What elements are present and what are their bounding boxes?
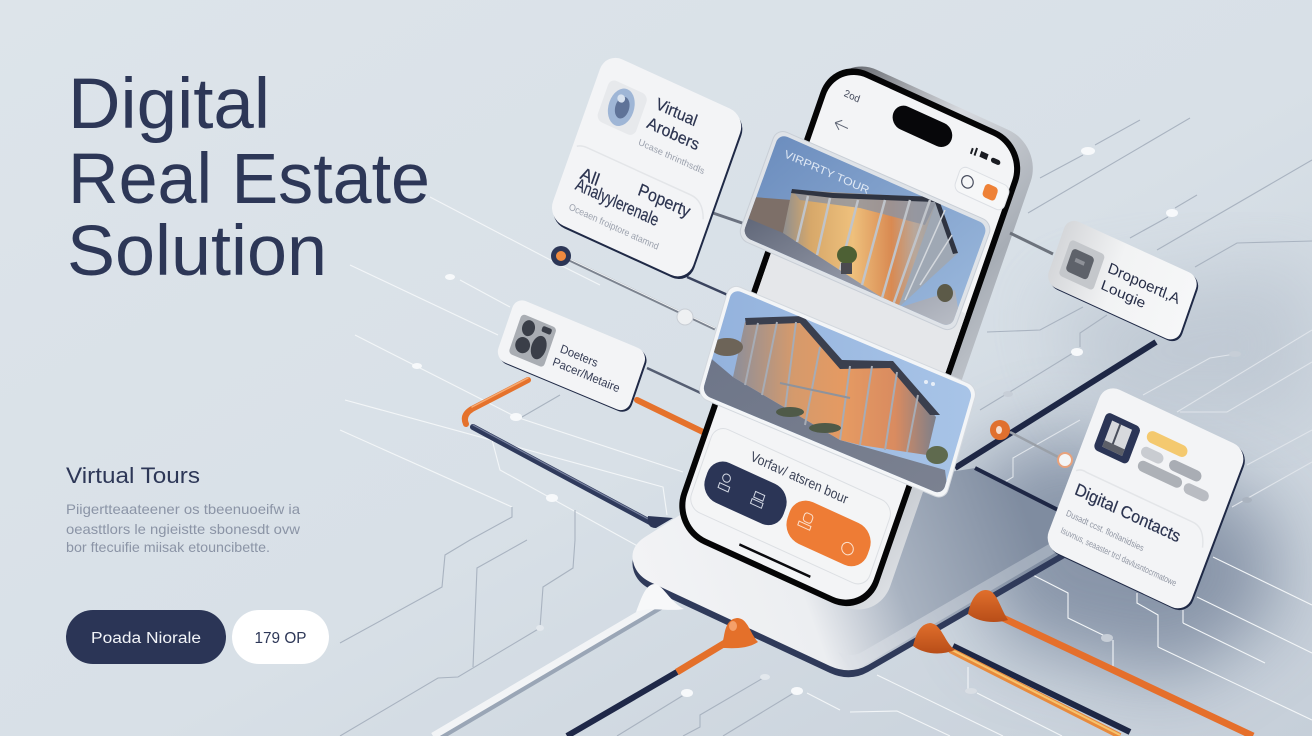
card heading 2: Poperty bbox=[636, 179, 693, 222]
icon: sphere thumbnail bbox=[596, 78, 649, 137]
card caption: Dusadt ccst. florilanidsies bbox=[1065, 508, 1146, 553]
cable: white bbox=[433, 584, 684, 736]
card caption: Isuvnus, seaaster trcl davlusntocrmatowe bbox=[1059, 525, 1178, 588]
navy button bbox=[699, 456, 792, 531]
pin: orange right node bbox=[990, 420, 1010, 440]
widget with icons bbox=[953, 165, 1011, 212]
icon: dark ovals bbox=[508, 314, 557, 368]
house image bbox=[744, 136, 986, 325]
card label bbox=[1099, 259, 1182, 324]
house photo card: upper bbox=[740, 131, 990, 330]
phone screen bbox=[676, 64, 1023, 610]
icon: device thumbnail bbox=[1058, 239, 1105, 291]
title: Real Estate bbox=[68, 140, 430, 219]
house photo card: lower bbox=[699, 286, 975, 498]
card heading 2: Analyylerenale bbox=[573, 174, 662, 230]
button: primary bbox=[66, 610, 226, 664]
cable: navy and orange right bbox=[913, 590, 1253, 736]
pin: white knob bbox=[677, 309, 693, 325]
placeholder bars bbox=[1134, 429, 1222, 503]
phone bezel bbox=[669, 56, 1030, 619]
house image bbox=[704, 291, 971, 492]
card: Virtual Arobers and Property bbox=[546, 52, 748, 285]
title: Solution bbox=[67, 212, 327, 291]
phone body bbox=[677, 54, 1043, 622]
card caption bbox=[1058, 508, 1184, 588]
pin: ring node bbox=[1058, 453, 1072, 467]
card label: Dropoertl,A bbox=[1106, 260, 1182, 308]
button: primary: Poada Niorale bbox=[91, 630, 201, 647]
icon: navy thumbnail bbox=[1093, 411, 1141, 465]
card label: Pacer/Metaire bbox=[551, 354, 622, 396]
card caption: Ucase thrinthsdls bbox=[637, 137, 706, 176]
circuit nodes bbox=[412, 147, 1252, 697]
subheading: Virtual Tours: Virtual Tours bbox=[66, 463, 200, 488]
description text bbox=[66, 501, 301, 555]
title: Digital bbox=[68, 65, 270, 144]
cable: navy and orange left bbox=[567, 618, 758, 736]
status time: 2od bbox=[842, 88, 861, 106]
title bbox=[67, 65, 430, 291]
description text: bor ftecuifie miisak etouncibette. bbox=[66, 539, 270, 555]
card heading: Arobers bbox=[645, 113, 702, 154]
panel caption: Vorfav/ atsren bour bbox=[749, 448, 851, 507]
button: secondary bbox=[232, 610, 329, 664]
card heading: Digital Contacts bbox=[1072, 480, 1183, 546]
card heading 2: All bbox=[578, 163, 602, 190]
description text: oeasttlors le ngieistte sbonesdt ovw bbox=[66, 521, 301, 537]
connector tube: navy right bbox=[955, 342, 1156, 468]
circuit lines bbox=[340, 118, 1312, 736]
pin: orange node bbox=[551, 246, 571, 266]
card: Dropoerty Lougie bbox=[1045, 217, 1202, 345]
card heading: Virtual bbox=[653, 94, 700, 130]
dock platform bbox=[632, 468, 1075, 677]
card label: Lougie bbox=[1099, 276, 1148, 311]
status icons bbox=[970, 146, 1002, 167]
card: Digital Contacts bbox=[1043, 383, 1250, 615]
connector tube: orange and navy bbox=[465, 378, 703, 522]
home indicator bbox=[739, 543, 811, 578]
card: Doeters bbox=[495, 297, 650, 415]
phone bbox=[669, 54, 1043, 622]
orange button bbox=[781, 494, 876, 572]
description text: Piigertteaateener os tbeenuoeifw ia bbox=[66, 501, 300, 517]
button: secondary: 179 OP bbox=[254, 630, 306, 647]
card dots bbox=[924, 380, 935, 386]
card heading bbox=[645, 93, 709, 154]
card label: Doeters bbox=[558, 341, 600, 370]
card caption 2: Oceaen froiptore atamnd bbox=[567, 202, 660, 253]
card label: VIRPRTY TOUR bbox=[782, 149, 871, 197]
action panel bbox=[687, 424, 894, 588]
icon: navy plug bbox=[648, 516, 673, 528]
divider bbox=[1070, 468, 1209, 548]
divider bbox=[572, 143, 709, 219]
pin connectors bbox=[561, 213, 1060, 458]
rear screen panel bbox=[724, 229, 966, 474]
dynamic island bbox=[889, 102, 955, 151]
back arrow bbox=[834, 118, 850, 133]
